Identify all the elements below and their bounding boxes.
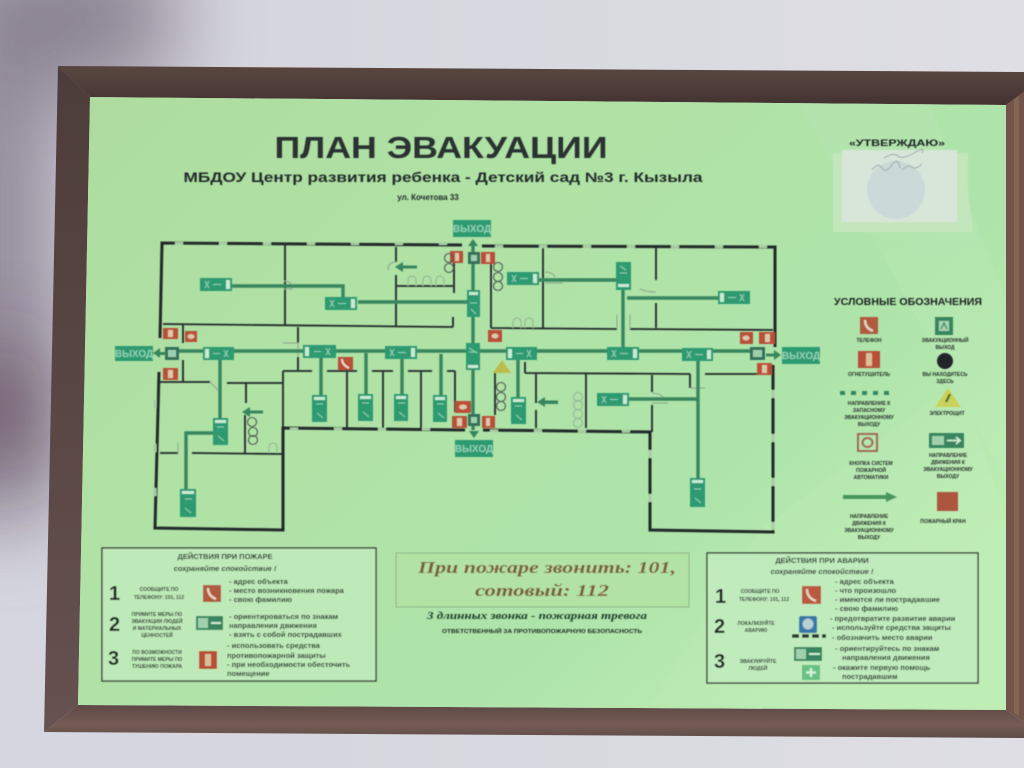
sign highlights bbox=[182, 274, 724, 494]
legend: reserve direction: НАПРАВЛЕНИЕ К bbox=[848, 401, 891, 407]
responsible person line: ОТВЕТСТВЕННЫЙ ЗА ПРОТИВОПОЖАРНУЮ БЕЗОПАСНОСТЬ bbox=[442, 627, 642, 635]
panel: actions in case of accident: АВАРИЮ bbox=[745, 628, 767, 634]
panel: actions in case of fire: ТЕЛЕФОНУ: 101, 112 bbox=[134, 595, 184, 601]
panel: actions in case of fire: - место возникновения пожара bbox=[229, 586, 345, 595]
panel: actions in case of accident: направления движения bbox=[842, 653, 930, 662]
panel: actions in case of fire: сохраняйте спокойствие ! bbox=[174, 564, 277, 573]
panel: actions in case of accident: 3 bbox=[714, 651, 725, 673]
panel: actions in case of accident: 2 bbox=[714, 616, 725, 638]
panel: actions in case of fire: ЦЕННОСТЕЙ bbox=[141, 631, 173, 639]
panel: actions in case of fire: - взять с собой пострадавших bbox=[229, 630, 343, 639]
exit door signs bbox=[165, 252, 765, 426]
outer walls bbox=[155, 243, 775, 532]
exit arrows bbox=[153, 239, 781, 438]
panel: actions in case of accident: - обозначить место аварии bbox=[832, 633, 933, 642]
panel: actions in case of accident: - имеются ли пострадавшие bbox=[835, 595, 940, 604]
panel: actions in case of accident: 1 bbox=[715, 586, 726, 608]
exit labels: ВЫХОД bbox=[115, 349, 153, 360]
panel: actions in case of accident: пострадавшим bbox=[842, 672, 898, 681]
legend: reserve direction: ВЫХОДУ bbox=[858, 422, 881, 428]
legend: phone bbox=[856, 317, 882, 344]
green board bbox=[78, 97, 1006, 710]
panel: actions in case of accident: сохраняйте спокойствие ! bbox=[771, 567, 874, 576]
panel: actions in case of accident: ЭВАКУИРУЙТЕ bbox=[740, 657, 777, 665]
legend: evacuation exit: ЭВАКУАЦИОННЫЙ bbox=[922, 336, 969, 344]
legend: route arrow: ДВИЖЕНИЯ К bbox=[852, 521, 887, 527]
legend: you are here: ВЫ НАХОДИТЕСЬ bbox=[923, 372, 968, 378]
panel: actions in case of fire: - адрес объекта bbox=[229, 577, 289, 586]
address: ул. Кочетова 33 bbox=[397, 193, 459, 202]
panel: actions in case of fire: - при необходимости обесточить bbox=[227, 660, 350, 669]
panel: emergency call notice: сотовый: 112 bbox=[475, 581, 610, 600]
panel: actions in case of fire: ПО ВОЗМОЖНОСТИ bbox=[132, 650, 182, 656]
legend: electrical panel: ЭЛЕКТРОЩИТ bbox=[929, 411, 965, 417]
title: ПЛАН ЭВАКУАЦИИ bbox=[274, 130, 608, 165]
legend: route arrow: ВЫХОДУ bbox=[858, 535, 881, 541]
panel: emergency call notice bbox=[396, 553, 689, 607]
vertical route signs bbox=[180, 262, 705, 517]
panel: actions in case of fire: СООБЩИТЕ ПО bbox=[140, 587, 179, 593]
legend: reserve direction bbox=[840, 393, 895, 428]
panel: actions in case of accident bbox=[707, 553, 978, 683]
approval stamp bbox=[833, 138, 973, 232]
exit labels: ВЫХОД bbox=[782, 351, 820, 362]
inner walls bbox=[160, 245, 773, 454]
legend: evacuation exit: ВЫХОД bbox=[935, 345, 955, 351]
legend: alarm button bbox=[849, 434, 893, 481]
exit labels: ВЫХОД bbox=[455, 444, 493, 455]
legend: alarm button: АВТОМАТИКИ bbox=[854, 475, 889, 481]
panel: actions in case of accident: - адрес объекта bbox=[835, 577, 895, 586]
legend: reserve direction: ЭВАКУАЦИОННОМУ bbox=[844, 415, 895, 421]
legend: exit direction sign: ЭВАКУАЦИОННОМУ bbox=[923, 467, 974, 473]
floor plan bbox=[115, 220, 820, 532]
exit labels bbox=[115, 220, 820, 457]
panel: actions in case of fire: противопожарной защиты bbox=[227, 651, 326, 660]
plan phone glyph bbox=[342, 359, 349, 368]
legend: phone: ТЕЛЕФОН bbox=[856, 338, 882, 344]
legend: reserve direction: ЗАПАСНОМУ bbox=[853, 408, 886, 414]
legend: exit direction sign bbox=[923, 433, 974, 480]
panel: actions in case of accident: - свою фамилию bbox=[835, 604, 899, 613]
door swings bbox=[178, 262, 705, 453]
panel: actions in case of accident: - окажите первую помощь bbox=[833, 663, 931, 672]
legend: electrical panel bbox=[929, 388, 965, 417]
panel: actions in case of fire bbox=[102, 548, 376, 681]
wall openings bbox=[155, 244, 775, 530]
panel: actions in case of accident: - что произошло bbox=[835, 586, 897, 595]
exit labels: ВЫХОД bbox=[453, 224, 491, 235]
panel: actions in case of fire: помещение bbox=[227, 669, 270, 678]
approval stamp: «УТВЕРЖДАЮ» bbox=[849, 138, 945, 148]
panel: actions in case of accident: - ориентируйтесь по знакам bbox=[835, 644, 940, 653]
panel: emergency call notice: При пожаре звонить: 101, bbox=[417, 558, 676, 577]
legend: fire hydrant bbox=[920, 492, 966, 525]
hose coils bbox=[248, 254, 506, 444]
panel: actions in case of accident: - используйте средства защиты bbox=[832, 623, 951, 632]
legend: extinguisher: ОГНЕТУШИТЕЛЬ bbox=[848, 372, 890, 378]
red fire equipment bbox=[163, 251, 775, 428]
panel: actions in case of fire: И МАТЕРИАЛЬНЫХ bbox=[133, 626, 182, 632]
horizontal route signs bbox=[200, 272, 750, 406]
evacuation routes bbox=[175, 245, 755, 490]
panel: actions in case of fire: направления движения bbox=[229, 621, 317, 630]
legend: exit direction sign: ВЫХОДУ bbox=[937, 474, 960, 480]
legend: alarm button: КНОПКА СИСТЕМ bbox=[849, 461, 893, 467]
panel: actions in case of fire: ПРИМИТЕ МЕРЫ ПО bbox=[132, 657, 182, 663]
legend: evacuation exit bbox=[922, 317, 969, 351]
alarm note: 3 длинных звонка - пожарная тревога bbox=[426, 611, 647, 622]
panel: actions in case of fire: 2 bbox=[109, 614, 120, 636]
legend heading: УСЛОВНЫЕ ОБОЗНАЧЕНИЯ bbox=[834, 297, 982, 308]
legend: route arrow: ЭВАКУАЦИОННОМУ bbox=[844, 528, 895, 534]
sign pictograms bbox=[185, 266, 744, 513]
panel: actions in case of fire: - ориентироваться по знакам bbox=[229, 612, 339, 621]
panel: actions in case of accident: ТЕЛЕФОНУ: 101, 112 bbox=[739, 597, 789, 603]
electrical panel triangle bbox=[493, 360, 511, 373]
legend: alarm button: ПОЖАРНОЙ bbox=[856, 466, 886, 474]
panel: actions in case of fire: 1 bbox=[109, 583, 120, 605]
legend: you are here: ЗДЕСЬ bbox=[936, 379, 954, 385]
legend: extinguisher bbox=[848, 351, 890, 378]
panel: actions in case of fire: - использовать средства bbox=[227, 641, 321, 650]
legend: fire hydrant: ПОЖАРНЫЙ КРАН bbox=[920, 517, 966, 525]
legend bbox=[834, 297, 982, 541]
subtitle: organisation: МБДОУ Центр развития ребенка - Детский сад №3 г. Кызыла bbox=[184, 170, 703, 185]
panel: actions in case of fire: 3 bbox=[108, 648, 119, 670]
panel: actions in case of fire: ДЕЙСТВИЯ ПРИ ПОЖАРЕ bbox=[177, 552, 273, 561]
legend: exit direction sign: НАПРАВЛЕНИЕ bbox=[929, 453, 968, 459]
panel: actions in case of accident: ЛОКАЛИЗУЙТЕ bbox=[737, 619, 775, 627]
pale fixtures bbox=[269, 276, 582, 453]
panel: actions in case of accident: ЛЮДЕЙ bbox=[748, 664, 768, 672]
panel: actions in case of fire: ТУШЕНИЮ ПОЖАРА bbox=[132, 664, 183, 670]
glass glare bbox=[650, 104, 1006, 708]
legend: you are here bbox=[923, 353, 968, 385]
legend: route arrow: НАПРАВЛЕНИЕ bbox=[850, 514, 889, 520]
panel: actions in case of accident: СООБЩИТЕ ПО bbox=[741, 589, 780, 595]
panel: actions in case of fire: ПРИМИТЕ МЕРЫ ПО bbox=[132, 612, 182, 618]
legend: route arrow bbox=[843, 492, 897, 541]
legend: exit direction sign: ДВИЖЕНИЯ К bbox=[931, 460, 966, 466]
panel: actions in case of fire: - свою фамилию bbox=[229, 595, 293, 604]
reserve direction arrows bbox=[242, 262, 558, 417]
panel: actions in case of fire: ЭВАКУАЦИИ ЛЮДЕЙ bbox=[131, 617, 183, 625]
panel: actions in case of accident: - предотвратите развитие аварии bbox=[830, 614, 956, 623]
panel: actions in case of accident: ДЕЙСТВИЯ ПРИ АВАРИИ bbox=[775, 556, 869, 565]
